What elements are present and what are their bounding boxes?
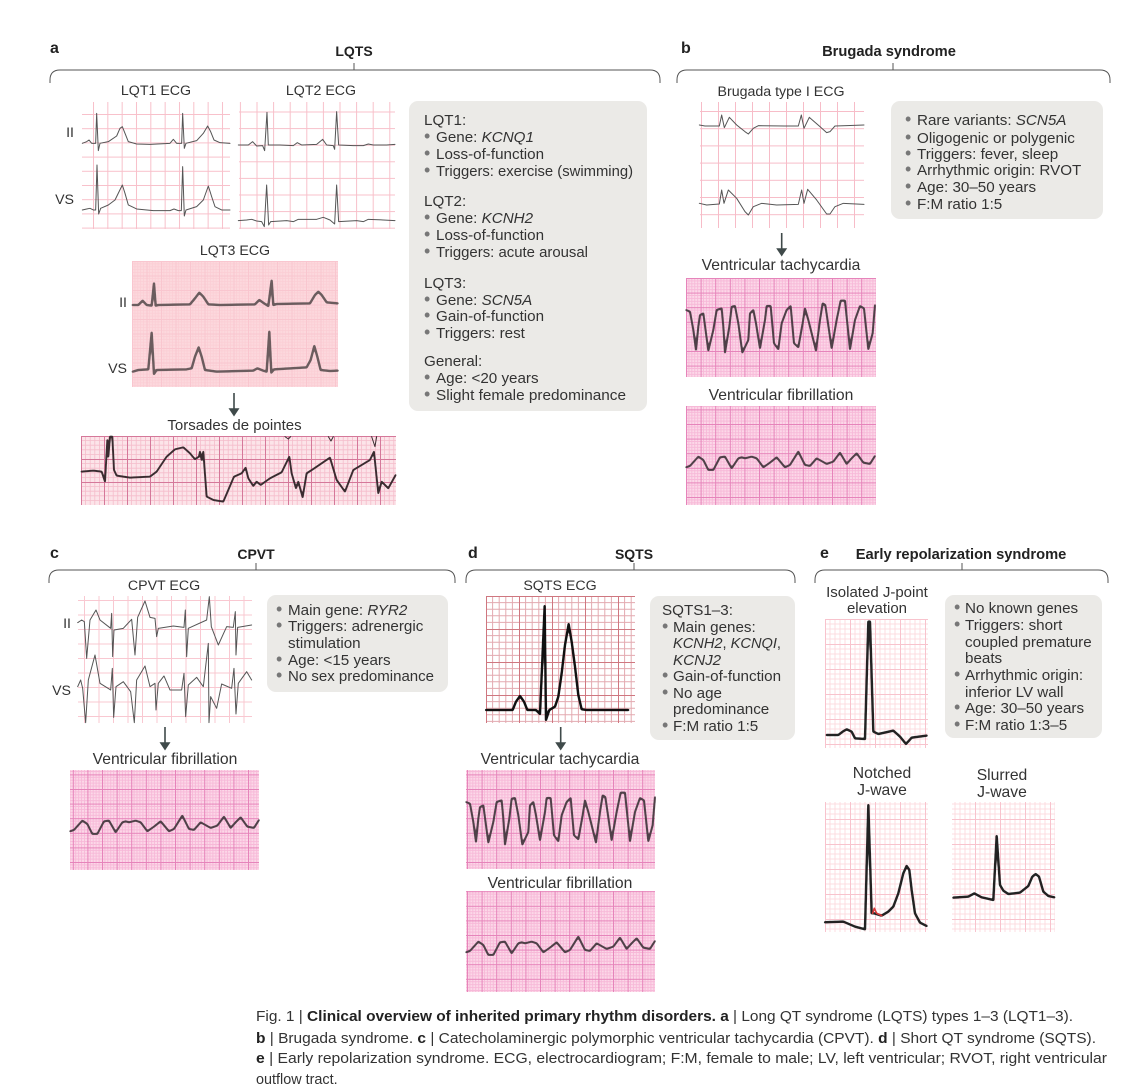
info box Brugada: Arrhythmic origin: RVOT (917, 162, 1081, 179)
info box CPVT (267, 595, 448, 692)
Ventricular fibrillation chart: Ventricular fibrillation (488, 875, 632, 892)
info box LQTS: Age: <20 years (436, 370, 539, 387)
info box LQTS: Gain-of-function (436, 308, 544, 325)
Slurred J-wave chart (952, 767, 1055, 932)
info box LQTS: • (424, 289, 430, 309)
LQT3 ECG chart (108, 243, 338, 387)
info box SQTS: No age (673, 685, 722, 702)
info box Early repolarization: Arrhythmic origin: (965, 667, 1083, 684)
bracket CPVT (49, 563, 455, 583)
info box LQTS: • (424, 305, 430, 325)
info box Brugada (891, 101, 1103, 219)
figure caption (256, 1009, 1107, 1088)
LQT1 ECG chart (55, 83, 230, 229)
panel e: Early repolarization syndrome (815, 545, 1108, 932)
panel letter c: c (50, 545, 59, 562)
panel letter e: e (820, 545, 829, 562)
info box LQTS: KCNQ1 (482, 129, 534, 146)
info box LQTS: LQT1: (424, 112, 466, 129)
panel letter d: d (468, 545, 478, 562)
info box Brugada: • (905, 159, 911, 179)
info box LQTS: Triggers: acute arousal (436, 244, 588, 261)
bracket LQTS (50, 63, 660, 83)
info box LQTS: LQT2: (424, 193, 466, 210)
info box Early repolarization: coupled premature (965, 634, 1092, 651)
LQT3 ECG chart: VS (108, 361, 127, 377)
Notched J-wave chart: J-wave (857, 782, 907, 799)
SQTS ECG chart (486, 578, 635, 723)
info box Brugada: Age: 30–50 years (917, 179, 1036, 196)
info box Brugada: Oligogenic or polygenic (917, 130, 1075, 147)
info box CPVT: RYR2 (367, 602, 408, 619)
info box Brugada: Rare variants: (917, 112, 1016, 129)
info box SQTS: • (662, 665, 668, 685)
info box SQTS: KCNJ2 (673, 652, 722, 669)
arrow to torsades (230, 393, 238, 415)
info box LQTS: • (424, 126, 430, 146)
info box LQTS: • (424, 143, 430, 163)
info box CPVT: Age: <15 years (288, 652, 391, 669)
Ventricular tachycardia chart (686, 257, 876, 377)
LQT2 ECG chart: LQT2 ECG (286, 83, 356, 99)
info box LQTS: • (424, 241, 430, 261)
info box Early repolarization: F:M ratio 1:3–5 (965, 717, 1067, 734)
Torsades de pointes chart: Torsades de pointes (167, 417, 302, 434)
Ventricular fibrillation chart (70, 751, 259, 870)
bracket SQTS (466, 563, 795, 583)
info box Brugada: F:M ratio 1:5 (917, 196, 1002, 213)
Slurred J-wave chart: Slurred (977, 767, 1027, 784)
bracket Early repolarization (815, 563, 1108, 583)
info box Early repolarization: • (954, 597, 960, 617)
LQT1 ECG chart: LQT1 ECG (121, 83, 191, 99)
bracket Brugada (677, 63, 1110, 83)
info box LQTS: • (424, 207, 430, 227)
info box SQTS: F:M ratio 1:5 (673, 718, 758, 735)
info box Brugada: SCN5A (1016, 112, 1066, 129)
info box CPVT: No sex predominance (288, 668, 434, 685)
panel b: Brugada syndrome (677, 40, 1110, 505)
Notched J-wave chart (825, 765, 928, 932)
info box Brugada: • (905, 127, 911, 147)
figure caption: e | Early repolarization syndrome. ECG, electrocardiogram; F:M, female to male; LV, left ventricular; RVOT, right ventricular (256, 1051, 1107, 1067)
Ventricular fibrillation chart: Ventricular fibrillation (93, 751, 237, 768)
info box CPVT: stimulation (288, 635, 361, 652)
Brugada type I ECG chart (699, 84, 864, 228)
info box LQTS: SCN5A (482, 292, 532, 309)
panel d: SQTS (466, 545, 795, 992)
info box LQTS: Slight female predominance (436, 387, 626, 404)
Isolated J-point elevation chart (825, 584, 929, 748)
Torsades de pointes chart (81, 417, 396, 505)
CPVT ECG chart: VS (52, 683, 71, 699)
info box Early repolarization: beats (965, 650, 1003, 667)
info box LQTS: • (424, 224, 430, 244)
heading: SQTS: SQTS (615, 546, 653, 562)
figure caption: Fig. 1 | Clinical overview of inherited primary rhythm disorders. a | Long QT syndrome (LQTS) types 1–3 (LQT1–3). (256, 1009, 1073, 1025)
info box SQTS: • (662, 715, 668, 735)
info box LQTS: LQT3: (424, 275, 466, 292)
Ventricular tachycardia chart (466, 751, 655, 869)
info box Early repolarization: inferior LV wall (965, 684, 1063, 701)
info box Brugada: • (905, 193, 911, 213)
LQT1 ECG chart: II (66, 125, 74, 141)
info box LQTS (409, 101, 647, 411)
panel letter b: b (681, 40, 691, 57)
info box Early repolarization: • (954, 714, 960, 734)
Ventricular tachycardia chart: Ventricular tachycardia (481, 751, 640, 768)
SQTS ECG chart: SQTS ECG (523, 578, 597, 594)
arrow to VT (557, 727, 565, 749)
LQT2 ECG chart (238, 83, 395, 229)
info box CPVT: • (276, 599, 282, 619)
heading: CPVT: CPVT (237, 546, 275, 562)
info box Early repolarization: No known genes (965, 600, 1079, 617)
Brugada type I ECG chart: Brugada type I ECG (718, 84, 844, 100)
info box SQTS: Main genes: (673, 619, 756, 636)
panel letter a: a (50, 40, 59, 57)
figure caption: outflow tract. (256, 1072, 338, 1088)
heading: Brugada syndrome: Brugada syndrome (822, 44, 956, 60)
Isolated J-point elevation chart: Isolated J-point (826, 584, 929, 601)
info box LQTS: • (424, 384, 430, 404)
arrow to VF (161, 727, 169, 749)
info box CPVT: • (276, 615, 282, 635)
info box LQTS: General: (424, 353, 482, 370)
info box Early repolarization: • (954, 664, 960, 684)
info box SQTS: SQTS1–3: (662, 602, 733, 619)
info box Early repolarization: Triggers: short (965, 617, 1063, 634)
info box LQTS: Gene: (436, 292, 482, 309)
CPVT ECG chart: II (63, 616, 71, 632)
figure caption: b | Brugada syndrome. c | Catecholaminergic polymorphic ventricular tachycardia (CPVT). d | Short QT syndrome (SQTS). (256, 1031, 1096, 1047)
arrow to VT (778, 233, 786, 255)
info box CPVT: Triggers: adrenergic (288, 618, 424, 635)
LQT3 ECG chart: II (119, 295, 127, 311)
Ventricular fibrillation chart: Ventricular fibrillation (709, 387, 853, 404)
info box Early repolarization: Age: 30–50 years (965, 700, 1084, 717)
info box Brugada: Triggers: fever, sleep (917, 146, 1058, 163)
info box LQTS: Triggers: exercise (swimming) (436, 163, 633, 180)
info box Early repolarization: • (954, 614, 960, 634)
info box LQTS: Gene: (436, 210, 482, 227)
info box SQTS: KCNH2, KCNQI, (673, 635, 781, 652)
Ventricular tachycardia chart: Ventricular tachycardia (702, 257, 861, 274)
Ventricular fibrillation chart (466, 875, 655, 992)
info box LQTS: Gene: (436, 129, 482, 146)
info box Brugada: • (905, 109, 911, 129)
info box CPVT: Main gene: (288, 602, 367, 619)
Notched J-wave chart: Notched (853, 765, 911, 782)
info box CPVT: • (276, 665, 282, 685)
heading: Early repolarization syndrome: Early repolarization syndrome (856, 547, 1066, 563)
info box LQTS: • (424, 322, 430, 342)
info box LQTS: • (424, 160, 430, 180)
panel a: LQTS (50, 40, 660, 505)
info box Brugada: • (905, 143, 911, 163)
info box Brugada: • (905, 176, 911, 196)
heading: LQTS: LQTS (335, 43, 373, 59)
Isolated J-point elevation chart: elevation (847, 600, 907, 617)
info box SQTS: Gain-of-function (673, 668, 781, 685)
panel c: CPVT (49, 545, 455, 870)
info box SQTS: • (662, 682, 668, 702)
info box SQTS: predominance (673, 701, 769, 718)
info box LQTS: Loss-of-function (436, 227, 544, 244)
LQT1 ECG chart: VS (55, 192, 74, 208)
info box SQTS: • (662, 616, 668, 636)
info box LQTS: Triggers: rest (436, 325, 526, 342)
CPVT ECG chart: CPVT ECG (128, 578, 200, 594)
LQT3 ECG chart: LQT3 ECG (200, 243, 270, 259)
info box Early repolarization (945, 595, 1102, 738)
Ventricular fibrillation chart (686, 387, 876, 505)
info box CPVT: • (276, 649, 282, 669)
CPVT ECG chart (52, 578, 252, 723)
Slurred J-wave chart: J-wave (977, 784, 1027, 801)
info box LQTS: Loss-of-function (436, 146, 544, 163)
info box LQTS: • (424, 367, 430, 387)
info box LQTS: KCNH2 (482, 210, 534, 227)
info box Early repolarization: • (954, 697, 960, 717)
info box SQTS (650, 596, 795, 740)
